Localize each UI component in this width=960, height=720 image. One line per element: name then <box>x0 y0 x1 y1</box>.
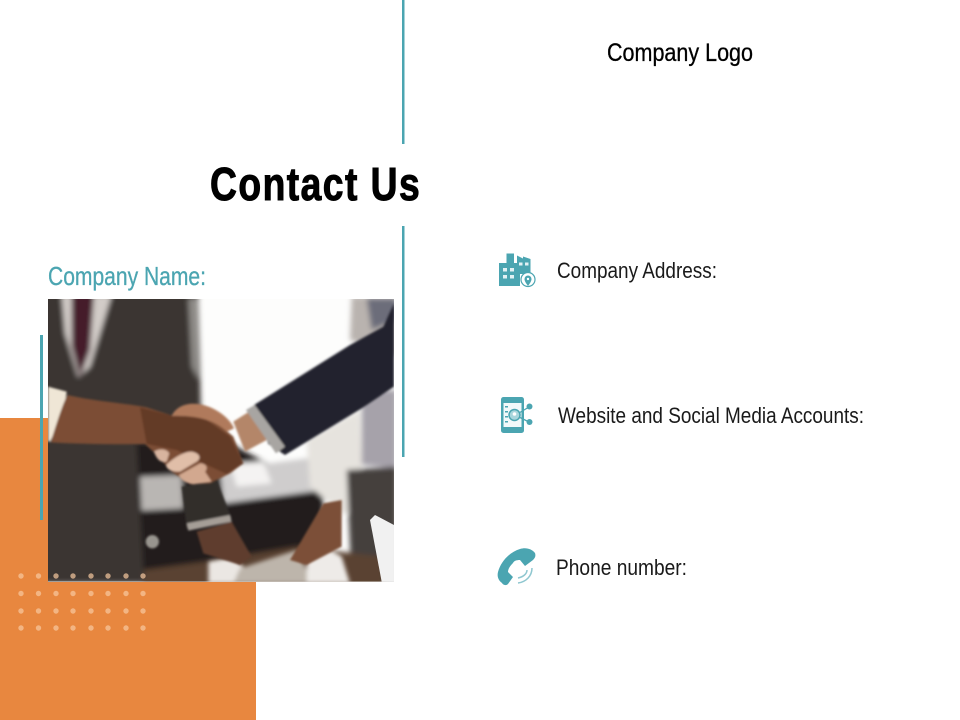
left teal accent line <box>40 335 43 520</box>
right teal vertical line bottom <box>402 226 404 457</box>
company name heading: Company Name: <box>48 261 206 291</box>
icon: phone with social network nodes <box>501 397 532 433</box>
title: Contact Us <box>210 158 421 210</box>
phone number label: Phone number: <box>556 555 687 580</box>
website and social label: Website and Social Media Accounts: <box>558 403 864 428</box>
orange background block <box>0 418 256 720</box>
company address label: Company Address: <box>557 258 717 283</box>
photo: business handshake <box>40 293 397 587</box>
decorative dot grid <box>18 573 146 631</box>
icon: telephone receiver <box>498 548 535 585</box>
icon: company address building with pin <box>499 254 535 286</box>
company logo label: Company Logo <box>607 39 753 67</box>
right teal vertical line top <box>402 0 404 144</box>
